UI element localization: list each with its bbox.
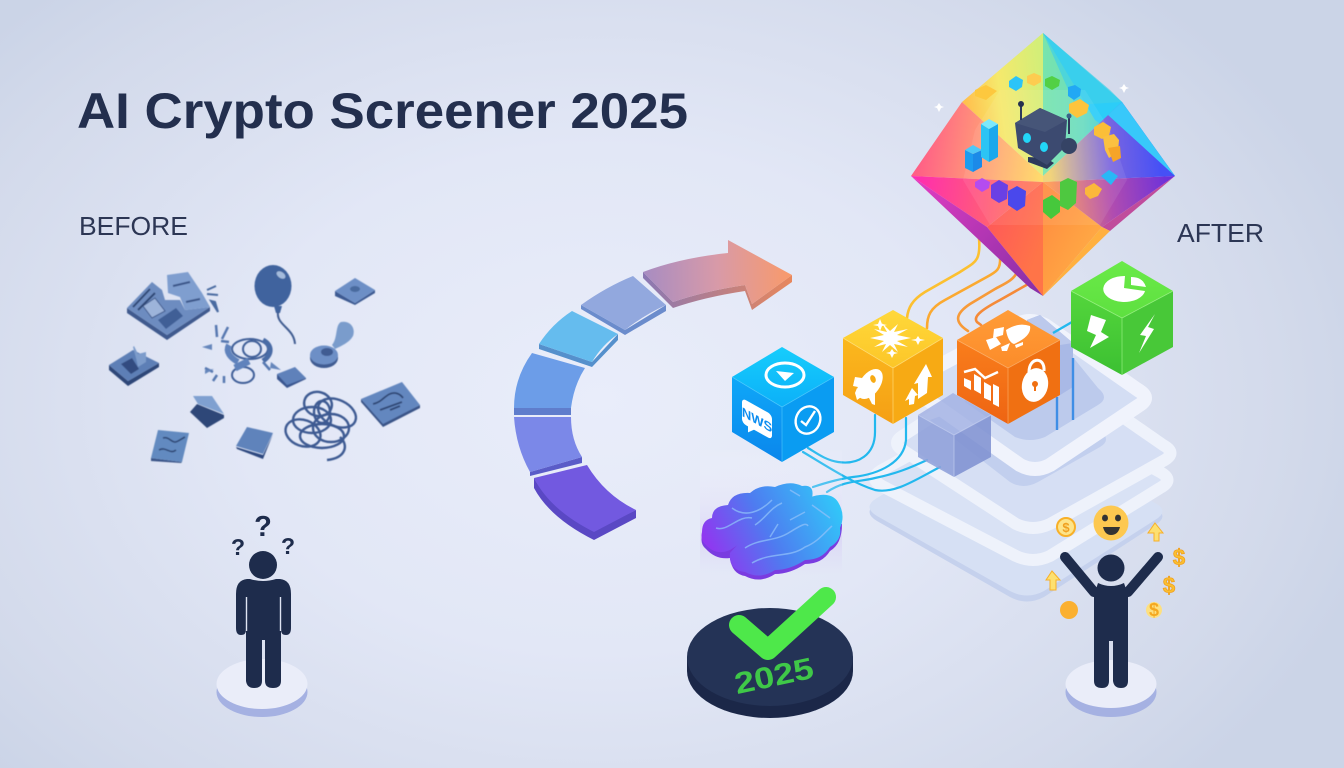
question marks: ?: [254, 511, 272, 543]
icon: glass cube: [918, 393, 991, 477]
label: after: AFTER: [1177, 218, 1264, 248]
progress arc arrow: [514, 240, 792, 540]
layered platforms: [870, 321, 1170, 602]
icon: blue news cube: [732, 347, 834, 462]
floating blocks: bottom ring: [975, 178, 1077, 219]
icon: chart card: [151, 430, 189, 463]
arc segment 3: [514, 353, 585, 415]
lightning bolts: [1087, 314, 1155, 353]
floating blocks: right ring: [1085, 122, 1121, 199]
icon: small chip: [335, 278, 375, 305]
padlock: [1019, 360, 1051, 404]
person: confused: [216, 511, 308, 717]
rocket: [852, 364, 888, 405]
scattered chaos icons: [109, 265, 420, 463]
icon: green cube: [1071, 261, 1173, 375]
upper band: [912, 321, 1145, 469]
icon: orange cube: [957, 310, 1060, 424]
label: before: BEFORE: [79, 211, 188, 241]
icon: exclamation: [310, 322, 354, 368]
person: happy: [1046, 506, 1185, 717]
coins and arrows: $: [1149, 600, 1159, 620]
icon: wedge tile: [236, 427, 273, 459]
inner plate: [960, 332, 1104, 440]
translucent pillar behind orange cube: [1027, 315, 1073, 397]
brain depth: [702, 502, 842, 580]
bar chart: [964, 369, 999, 407]
pie chart: [1103, 276, 1146, 302]
question marks: [231, 511, 295, 560]
icon: small card with pin: [109, 346, 159, 386]
icon: yellow rocket cube: [843, 310, 943, 424]
question marks: ?: [231, 534, 245, 560]
icon: AI brain: [702, 483, 843, 580]
floating blocks: left bars: [965, 119, 998, 172]
play badge: [766, 363, 804, 387]
2025 check badge: [687, 597, 853, 718]
prism with AI robot: [911, 33, 1175, 296]
arrow head segment: [643, 240, 792, 310]
check mark: [739, 597, 826, 650]
icon: small square tile: [277, 367, 306, 388]
sparkles: [934, 84, 1129, 112]
lower band: [875, 399, 1168, 560]
lower dark plate: [930, 380, 1106, 486]
coins and arrows: $: [1062, 520, 1070, 535]
rocket top: [986, 325, 1030, 351]
coins and arrows: [1046, 518, 1185, 620]
arc segment 1: [534, 465, 636, 540]
brain folds: [716, 490, 832, 563]
icon: balloon: [254, 265, 295, 344]
arc segment 4: [539, 311, 618, 367]
upper lobe: [702, 483, 813, 552]
icon: broken ring swirl: [202, 325, 281, 383]
robot: [1015, 101, 1077, 169]
coins and arrows: $: [1173, 545, 1185, 570]
burst: [870, 319, 925, 358]
connector wires: blue: [803, 415, 940, 492]
NEWS bubble: NWS: [742, 404, 772, 436]
middle band: [897, 359, 1170, 528]
icon: tangled wire: [282, 389, 361, 460]
2025 label: 2025: [732, 652, 817, 701]
wire links behind green cube: [1053, 322, 1073, 430]
floating blocks: top ring: [975, 73, 1089, 118]
question marks: ?: [281, 533, 295, 559]
figure: [236, 551, 291, 688]
figure: [1065, 554, 1158, 688]
lower lobe: [730, 495, 843, 576]
arc segment 5: [581, 276, 666, 335]
connector wires: orange: [907, 238, 1030, 331]
icon: graph card: [361, 382, 420, 427]
glass column behind brain: [700, 450, 842, 575]
icon: folded card: [190, 396, 224, 428]
up arrows: [905, 364, 932, 405]
title: AI Crypto Screener 2025: [77, 82, 688, 139]
pedestal: [1066, 660, 1156, 717]
check bubble: [791, 402, 825, 438]
coins and arrows: $: [1163, 573, 1175, 598]
arc segment 2: [514, 417, 582, 476]
icon: torn newspaper: [127, 272, 218, 340]
smiley face: [1094, 506, 1128, 540]
lowest plate: [870, 424, 1162, 602]
prism facets: [911, 33, 1175, 296]
pedestal: [216, 659, 308, 717]
disc: [687, 608, 853, 718]
